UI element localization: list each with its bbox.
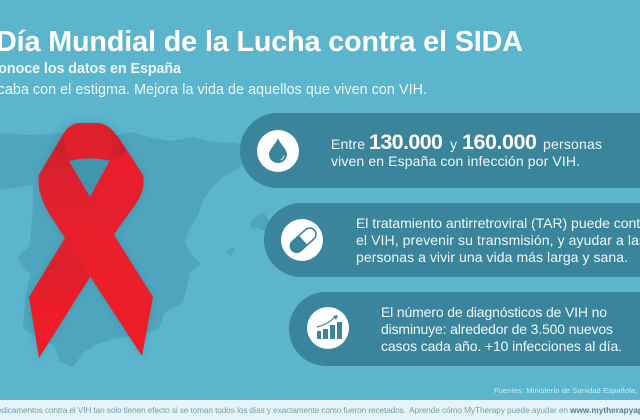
- panel text line 2: viven en España con infección por VIH.: [331, 153, 580, 169]
- panel: people living with HIV: [240, 113, 640, 188]
- diagnoses text: [381, 304, 622, 354]
- map of Spain: [0, 132, 270, 367]
- icon: drop: [257, 130, 299, 172]
- footer text: [0, 405, 640, 415]
- footer band: [0, 400, 640, 420]
- footer text: Aprende cómo MyTherapy puede ayudar en: [409, 405, 568, 415]
- diagnoses text: casos cada año. +10 infecciones al día.: [381, 338, 622, 354]
- panel text: 130.000: [369, 130, 443, 154]
- panel text: y: [450, 136, 457, 152]
- ribbon back band: [29, 135, 144, 358]
- treatment text: el VIH, prevenir su transmisión, y ayudar a las: [356, 232, 640, 248]
- ribbon top loop: [39, 123, 127, 178]
- ribbon front band: [38, 136, 153, 356]
- icon: rising bars: [307, 307, 349, 349]
- panel: treatment: [264, 203, 640, 277]
- title: Día Mundial de la Lucha contra el SIDA: [0, 26, 523, 58]
- treatment text: personas a vivir una vida más larga y sana.: [356, 249, 628, 265]
- tagline: Acaba con el estigma. Mejora la vida de aquellos que viven con VIH.: [0, 82, 427, 98]
- panel: diagnoses: [289, 292, 640, 366]
- panel text: Entre: [331, 136, 365, 152]
- red ribbon: [29, 123, 153, 358]
- icon: capsule: [281, 219, 323, 261]
- panel text: 160.000: [462, 130, 537, 154]
- diagnoses text: El número de diagnósticos de VIH no: [381, 304, 607, 320]
- panel text: personas: [543, 136, 602, 152]
- treatment text: [356, 215, 640, 265]
- diagnoses text: disminuye: alrededor de 3.500 nuevos: [381, 321, 613, 337]
